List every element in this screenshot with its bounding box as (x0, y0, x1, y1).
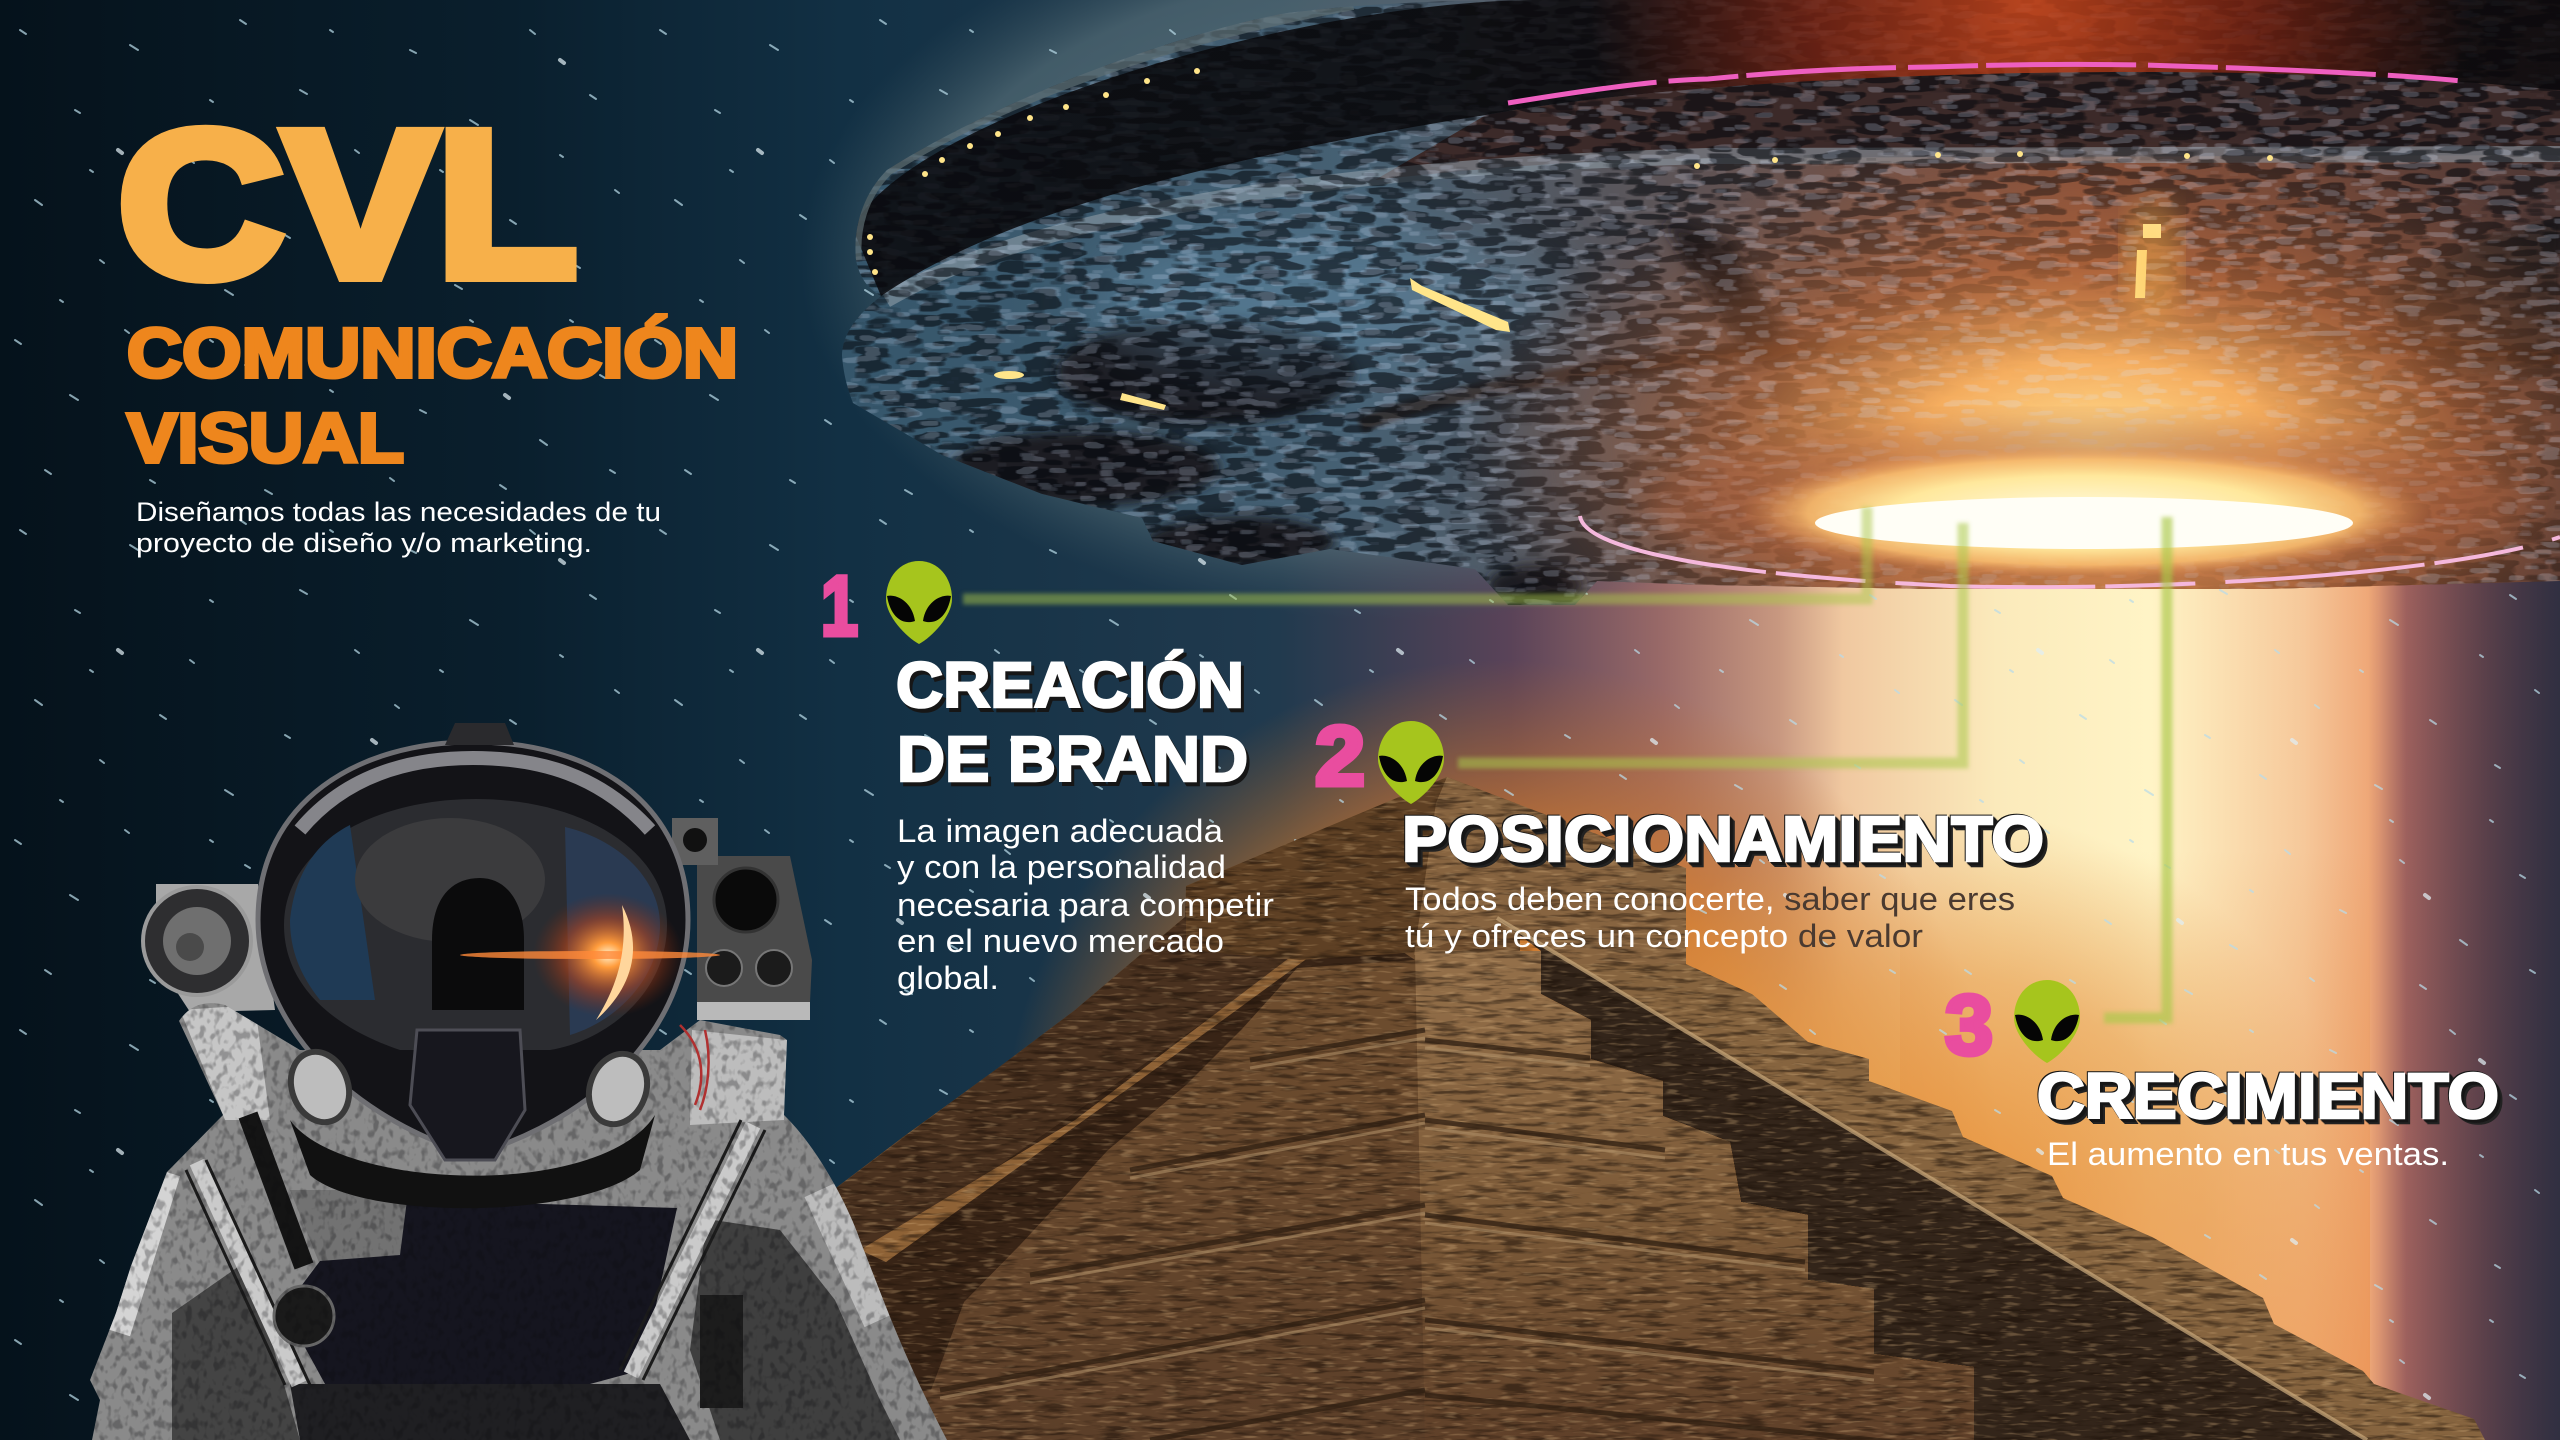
right arm dark (690, 1219, 900, 1440)
helmet shell (258, 742, 688, 1155)
step 1 heading: DE BRAND (897, 723, 1248, 795)
stair balustrade highlight (1497, 918, 2367, 1440)
suit outline details (186, 1120, 765, 1385)
intro text: proyecto de diseño y/o marketing. (136, 528, 592, 558)
visor blue mesh left (290, 825, 375, 1000)
left face shadow (850, 925, 1415, 1400)
left lower dark (172, 1260, 300, 1440)
brick texture (820, 770, 2500, 1440)
block texture dark (820, 0, 2560, 620)
helmet inner shadow (432, 878, 524, 1010)
visor glass (284, 799, 667, 1050)
collar pads (180, 1005, 270, 1120)
pyramid (820, 770, 2560, 1440)
inner padding (355, 818, 545, 942)
dark upper hull with red glow (853, 0, 2560, 296)
astronaut (80, 723, 960, 1440)
inner ring (1644, 423, 2524, 587)
left stair lit strip (860, 927, 1342, 1262)
pyramid left face (820, 770, 1520, 1440)
step 1 text: necesaria para competir (897, 887, 1274, 923)
filter right (579, 1046, 657, 1132)
icon: alien head 3 (2014, 980, 2080, 1063)
temple left side (1186, 777, 1447, 960)
wires (680, 1025, 709, 1110)
terrace courses (940, 1030, 1974, 1440)
step 1 text: en el nuevo mercado (897, 923, 1224, 959)
step 2 heading: POSICIONAMIENTO (1402, 803, 2044, 875)
front lit stepped face (1415, 950, 1974, 1440)
helmet top nub (445, 723, 514, 745)
intro text: Diseñamos todas las necesidades de tu (136, 497, 661, 527)
title: CVL: CVL (118, 89, 577, 321)
back left plane (820, 900, 1342, 1270)
UFO spaceship (820, 0, 2560, 620)
icon: alien head 2 (1378, 721, 1444, 804)
pink light arc upper (1508, 64, 2462, 103)
yellow hull lights (867, 68, 2273, 410)
back cylinder pack (143, 884, 275, 1012)
block texture light (820, 0, 2560, 620)
light rim band (886, 154, 2560, 300)
filter left (281, 1044, 359, 1130)
step 1 text (897, 813, 1274, 996)
flare streak (460, 951, 720, 959)
step 1 number: 1 (821, 559, 858, 653)
step 3 heading: CRECIMIENTO (2037, 1060, 2499, 1132)
step 1 heading (896, 649, 1248, 795)
blue lit plating (1090, 225, 1570, 375)
intro text (136, 497, 661, 558)
engine light disc (1815, 497, 2353, 549)
dark ring seam (1360, 335, 2560, 425)
temple right side (1414, 777, 1686, 964)
stair surface on right (1497, 918, 2560, 1440)
icon: alien head 1 (886, 561, 952, 644)
step 1 text: La imagen adecuada (897, 813, 1223, 849)
step 2 text: tú y ofreces un concepto de valor (1405, 918, 1923, 954)
step 2 text (1405, 881, 2015, 954)
subtitle line 1: COMUNICACIÓN (127, 314, 738, 392)
step 1 text: global. (897, 960, 999, 996)
step 2 text: Todos deben conocerte, saber que eres (1405, 881, 2015, 917)
grey bib (290, 1190, 420, 1265)
step 3 text: El aumento en tus ventas. (2047, 1136, 2449, 1172)
chest dark panel (284, 1200, 677, 1384)
helmet top ring (300, 758, 650, 830)
engine glow (1488, 146, 2560, 593)
mask (410, 1030, 525, 1160)
right shadow region (1497, 918, 2367, 1440)
connector lines (963, 507, 2167, 1018)
helmet collar (290, 1115, 655, 1208)
step 1 heading: CREACIÓN (896, 649, 1244, 721)
dark hull lobes (950, 220, 2560, 605)
visor blue mesh right (565, 827, 660, 1035)
step 2 number: 2 (1315, 709, 1365, 803)
step 3 number: 3 (1945, 978, 1993, 1072)
terrace highlights (940, 1038, 1874, 1398)
suit body (80, 1000, 960, 1440)
hose (248, 1115, 304, 1266)
subtitle line 2: VISUAL (127, 399, 404, 477)
step 1 text: y con la personalidad (897, 849, 1226, 885)
pink light ring lower (1580, 516, 2560, 587)
straps (197, 1125, 753, 1384)
outer rim edge (855, 4, 1353, 260)
hull band below pink light (1375, 72, 2560, 180)
lens flare (533, 893, 683, 1017)
right pack (672, 818, 812, 1020)
